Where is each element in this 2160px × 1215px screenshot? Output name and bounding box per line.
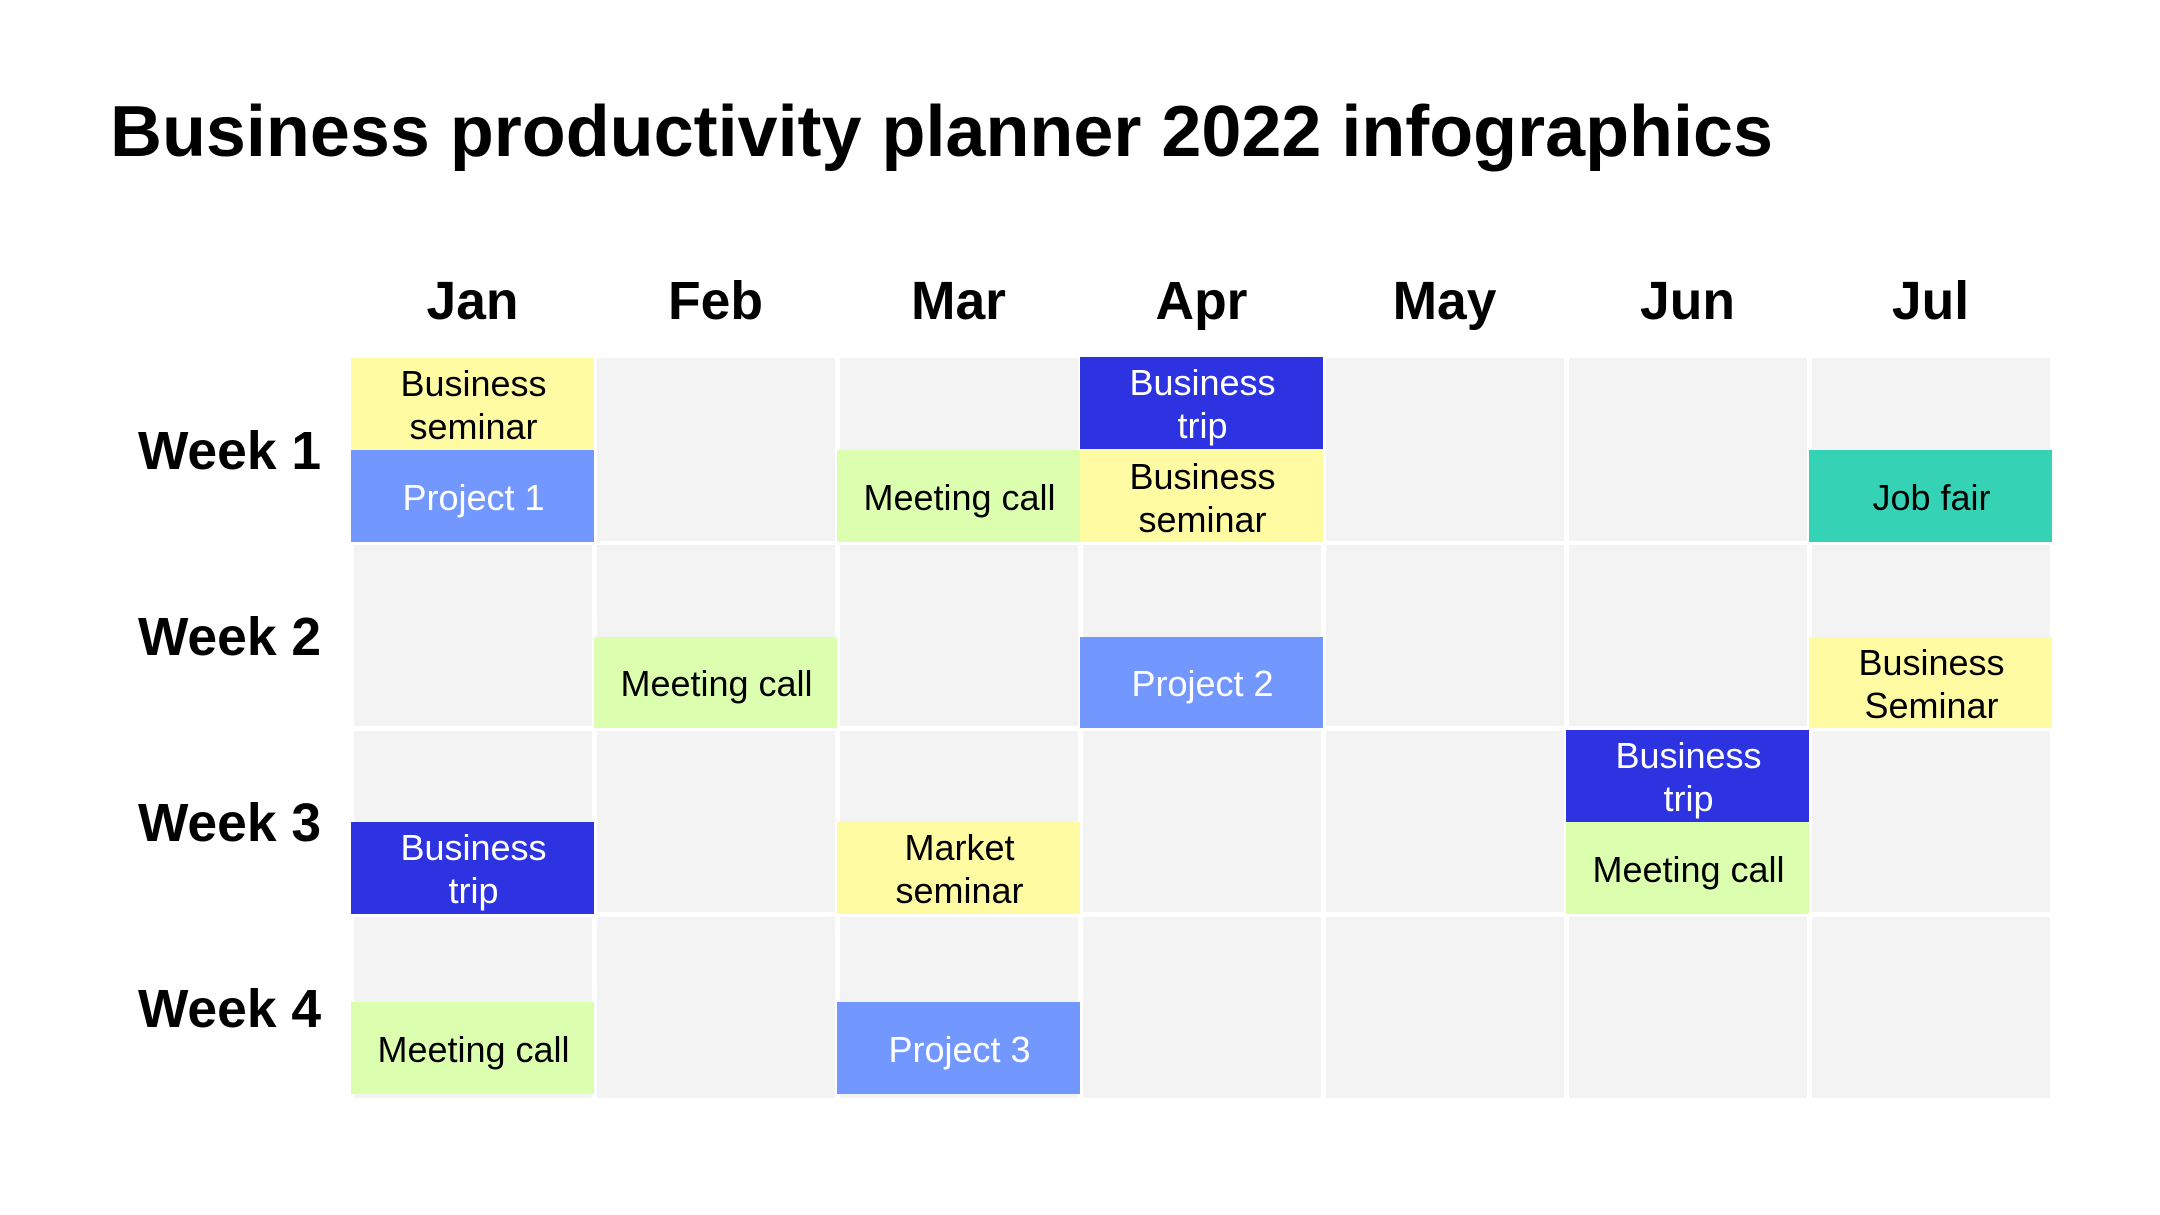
event: Jan week 3 business trip: trip — [448, 870, 498, 911]
event: Jun week 3 business trip: Business — [1615, 735, 1762, 776]
month headers: Jan — [426, 272, 518, 331]
event: Feb week 2 meeting call — [594, 637, 837, 728]
week labels — [138, 422, 321, 1039]
month headers: Mar — [911, 272, 1006, 331]
event: Apr week 1 business seminar: seminar — [1138, 498, 1267, 540]
event: Jan week 1 project 1: Project 1 — [402, 476, 545, 518]
event: Apr week 2 project 2: Project 2 — [1131, 663, 1274, 704]
event: Mar week 4 project 3: Project 3 — [888, 1028, 1031, 1070]
event: Jan week 1 business seminar: seminar — [409, 406, 538, 447]
week labels: Week 3 — [138, 794, 321, 853]
event: Jul week 1 job fair — [1809, 450, 2052, 542]
event: Jan week 1 business seminar — [351, 358, 594, 450]
event: Apr week 1 business trip: trip — [1177, 405, 1228, 446]
event: Jul week 2 business seminar: Seminar — [1864, 684, 1999, 726]
event: Jun week 3 business trip: trip — [1663, 778, 1714, 819]
event: Jan week 4 meeting call: Meeting call — [377, 1028, 570, 1070]
event: Mar week 3 market seminar: Market — [904, 827, 1014, 868]
week labels: Week 4 — [138, 980, 321, 1039]
month headers: Feb — [668, 272, 763, 331]
event: Mar week 3 market seminar: seminar — [895, 870, 1024, 911]
event: Mar week 1 meeting call: Meeting call — [863, 476, 1056, 518]
month headers — [426, 272, 1969, 331]
month headers: Jul — [1892, 272, 1969, 331]
event: Jan week 1 project 1 — [351, 450, 594, 542]
event: Jan week 1 business seminar: Business — [400, 363, 547, 404]
week labels: Week 2 — [138, 608, 321, 667]
month headers: Apr — [1156, 272, 1247, 331]
event: Jun week 3 business trip — [1566, 730, 1809, 822]
event: Apr week 1 business seminar — [1080, 449, 1323, 542]
event: Jan week 3 business trip — [351, 822, 594, 914]
month headers: May — [1393, 272, 1496, 331]
event: Jun week 3 meeting call: Meeting call — [1592, 848, 1785, 890]
event: Apr week 2 project 2 — [1080, 637, 1323, 728]
event: Apr week 1 business trip: Business — [1129, 362, 1276, 403]
week labels: Week 1 — [138, 422, 321, 481]
event: Mar week 3 market seminar — [837, 822, 1080, 914]
event: Apr week 1 business trip — [1080, 357, 1323, 449]
event: Jan week 3 business trip: Business — [400, 827, 547, 868]
event: Jan week 4 meeting call — [351, 1002, 594, 1094]
title: Business productivity planner 2022 infographics — [110, 92, 1773, 172]
event: Jun week 3 meeting call — [1566, 822, 1809, 914]
event: Jul week 1 job fair: Job fair — [1872, 476, 1991, 518]
event: Jul week 2 business seminar: Business — [1858, 642, 2005, 682]
event: Mar week 1 meeting call — [837, 450, 1080, 542]
event: Jul week 2 business seminar — [1809, 637, 2052, 728]
month headers: Jun — [1640, 272, 1735, 331]
event: Feb week 2 meeting call: Meeting call — [620, 663, 813, 704]
event: Apr week 1 business seminar: Business — [1129, 456, 1276, 496]
calendar grid background — [354, 358, 2050, 1098]
event: Mar week 4 project 3 — [837, 1002, 1080, 1094]
